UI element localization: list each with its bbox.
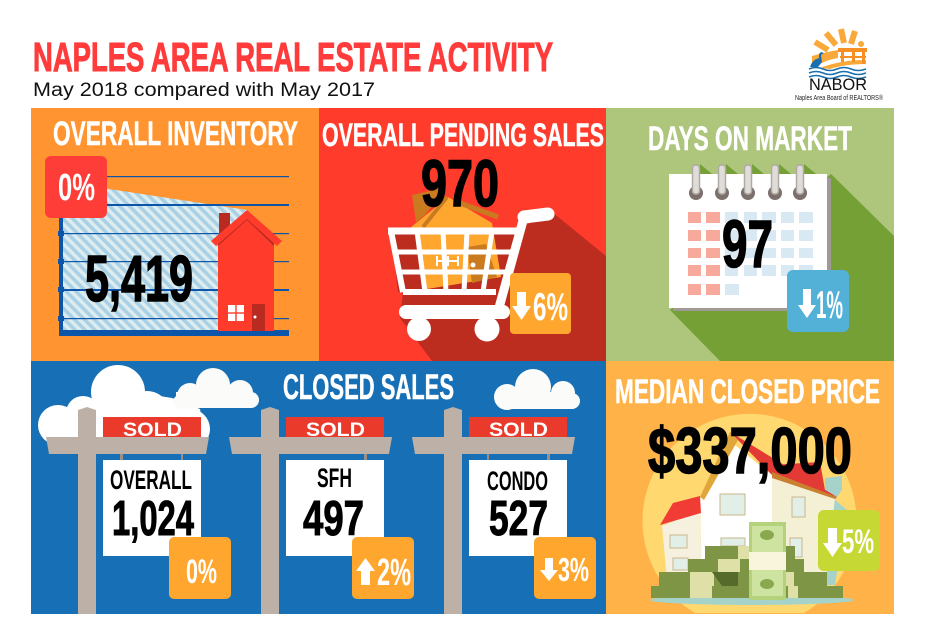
heading: closed sales: CLOSED SALES bbox=[283, 368, 454, 407]
badge: down 5% bbox=[818, 510, 880, 571]
badge: down 6%: 6% bbox=[533, 286, 568, 329]
panel: median closed price bbox=[606, 361, 894, 614]
panel: days on market bbox=[606, 108, 894, 361]
sign: condo: SOLD bbox=[489, 420, 548, 441]
sign: SFH bbox=[229, 407, 414, 614]
sign: overall: 0% bbox=[186, 553, 217, 591]
logo: NABOR: NABOR bbox=[809, 75, 867, 94]
value: 97: 97 bbox=[722, 207, 773, 282]
badge: down 5%: 5% bbox=[842, 523, 874, 561]
value: $337,000: $337,000 bbox=[648, 414, 852, 487]
icon: house in cart bbox=[388, 187, 548, 342]
area chart bbox=[58, 176, 289, 336]
sign: SFH: 2% bbox=[377, 552, 411, 594]
sign: condo bbox=[412, 407, 596, 614]
badge: 0%: 0% bbox=[58, 167, 95, 209]
sign: condo: CONDO bbox=[487, 466, 548, 496]
badge: down 1% bbox=[787, 270, 849, 332]
logo: NABOR bbox=[795, 29, 884, 102]
title: NAPLES AREA REAL ESTATE ACTIVITY bbox=[33, 34, 553, 80]
value: 5,419: 5,419 bbox=[85, 242, 193, 315]
badge: down 6% bbox=[510, 273, 571, 334]
sign: condo: 527 bbox=[489, 492, 548, 546]
cloud right bbox=[494, 369, 580, 410]
heading: overall inventory: OVERALL INVENTORY bbox=[53, 115, 298, 153]
panel: overall pending sales bbox=[319, 108, 606, 361]
panel: overall inventory bbox=[31, 108, 319, 361]
logo: NABOR: Naples Area Board of REALTORS® bbox=[795, 94, 884, 102]
sign: overall bbox=[46, 407, 231, 614]
badge: down 1%: 1% bbox=[816, 284, 843, 327]
icon: red house bbox=[211, 210, 282, 331]
illustration: house and money bbox=[642, 414, 856, 613]
cloud middle bbox=[173, 368, 259, 409]
subtitle: May 2018 compared with May 2017 bbox=[33, 80, 375, 101]
sign: SFH: SOLD bbox=[306, 420, 365, 441]
sign: condo: 3% bbox=[558, 551, 589, 588]
sign: overall: SOLD bbox=[123, 420, 182, 441]
cloud left bbox=[38, 365, 210, 449]
sign: SFH: 497 bbox=[303, 492, 364, 546]
panel: closed sales bbox=[31, 361, 606, 614]
heading: overall pending sales: OVERALL PENDING SALES bbox=[322, 117, 604, 153]
sign: overall: 1,024 bbox=[112, 492, 194, 546]
sign: overall: OVERALL bbox=[110, 465, 192, 495]
icon: calendar bbox=[669, 164, 831, 311]
sign: SFH: SFH bbox=[317, 463, 352, 493]
value: 970: 970 bbox=[421, 146, 499, 220]
badge: 0% bbox=[45, 156, 107, 218]
